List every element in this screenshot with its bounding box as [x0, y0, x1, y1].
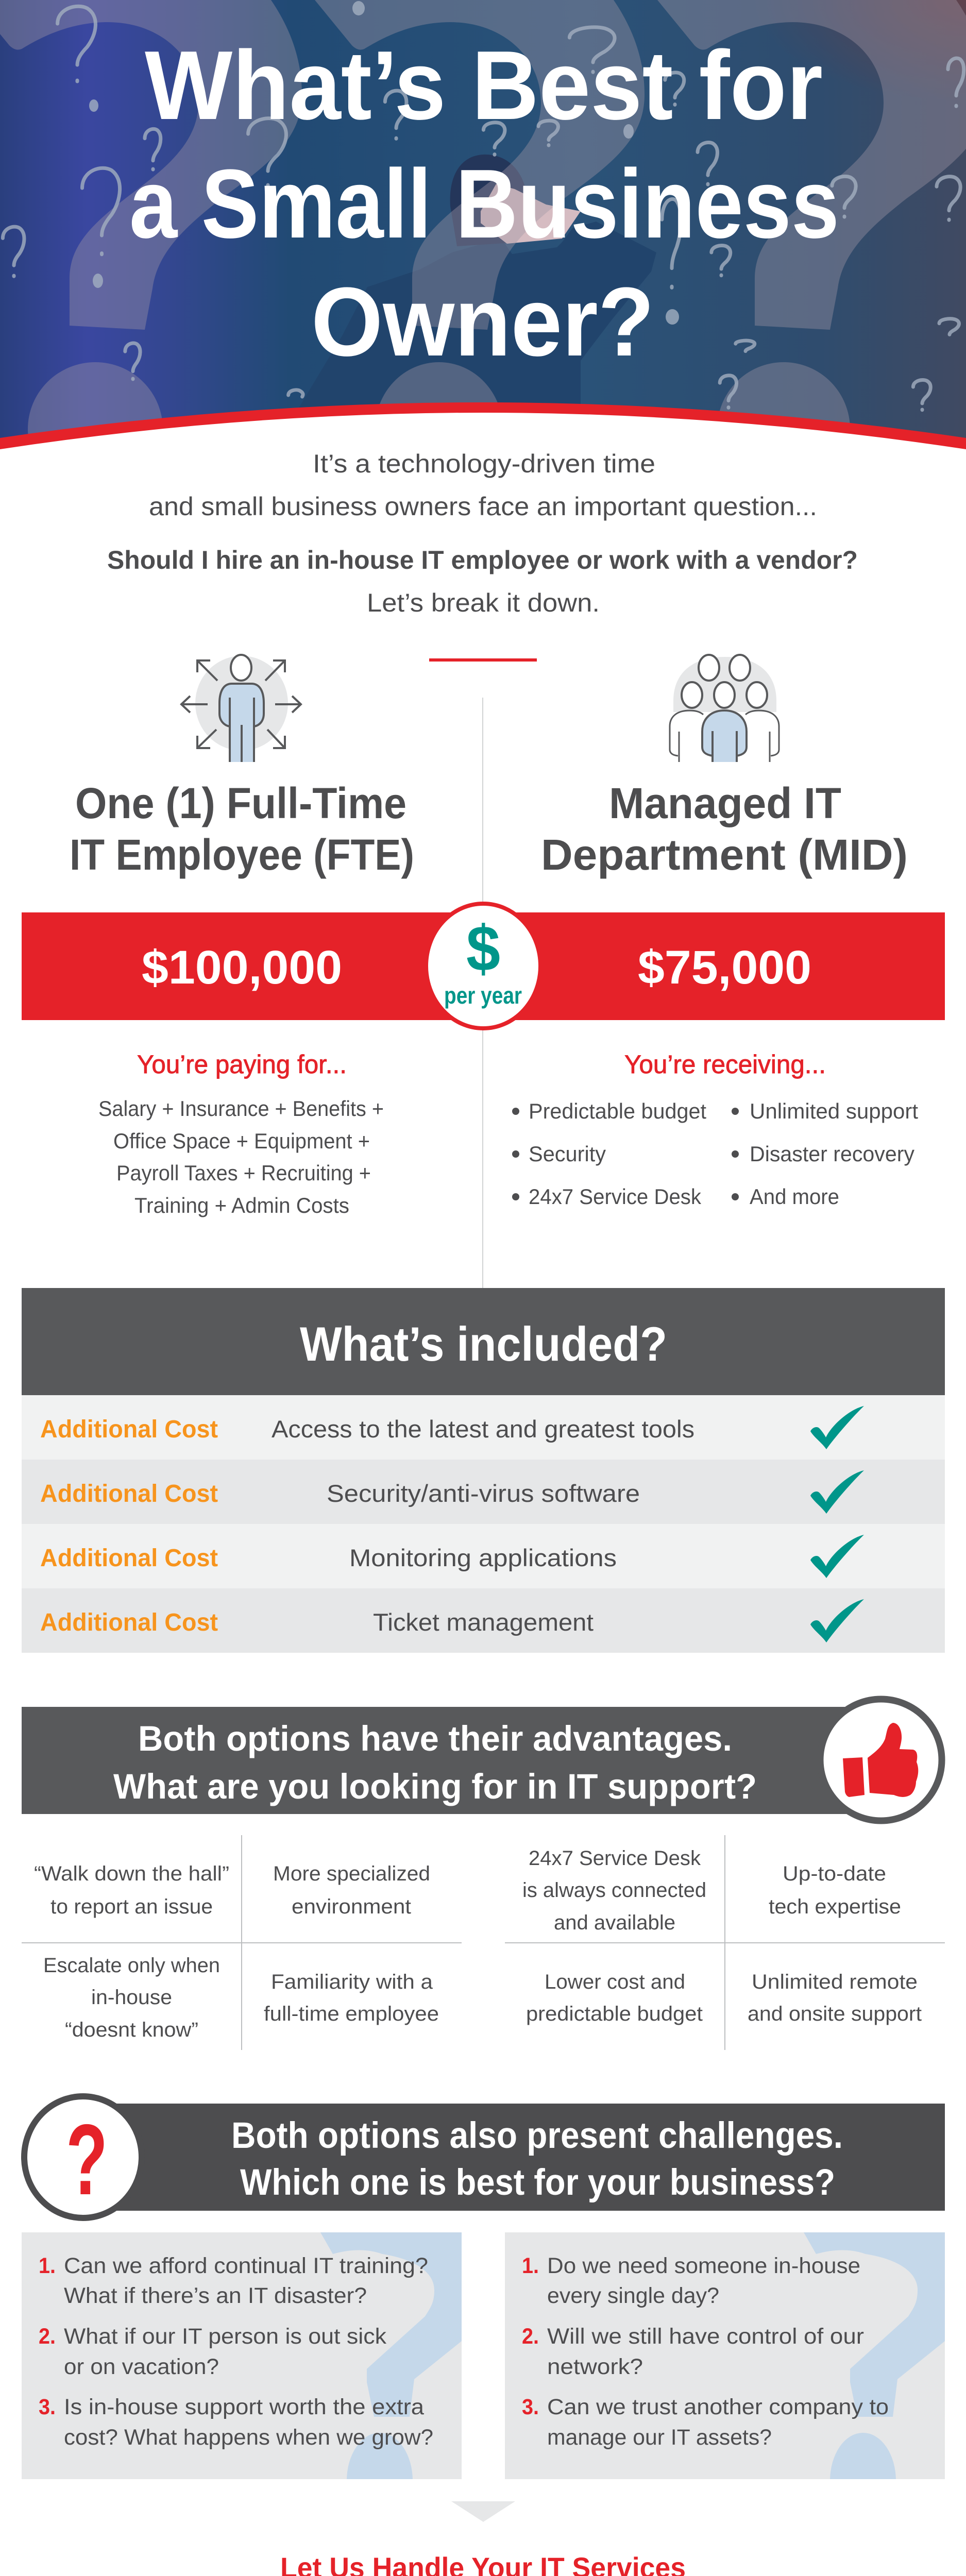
- advantages grid: [22, 1835, 945, 2050]
- panel: vendor challenges: 2.: [522, 2324, 539, 2349]
- banner: advantages: What are you looking for in IT support?: [113, 1767, 757, 1806]
- banner: advantages: [22, 1699, 942, 1821]
- receiving list: And more: [750, 1184, 839, 1209]
- row: tools: Access to the latest and greatest tools: [272, 1415, 694, 1443]
- panel: vendor challenges: 1.: [522, 2253, 539, 2278]
- cell: Unlimited remote: [752, 1971, 918, 1993]
- cell: full-time employee: [264, 2003, 439, 2025]
- icon: managed team: [670, 655, 779, 762]
- arrow: down: [451, 2501, 515, 2522]
- row: monitoring: [40, 1535, 864, 1578]
- panel: vendor challenges: [505, 2232, 945, 2479]
- cell: [273, 1862, 430, 1918]
- intro text: Let’s break it down.: [367, 588, 600, 617]
- price band: [22, 904, 945, 1028]
- heading: what's included: What’s included?: [300, 1317, 667, 1371]
- row: tickets: Additional Cost: [40, 1609, 218, 1636]
- cell: [748, 1971, 922, 2025]
- cell: predictable budget: [526, 2003, 703, 2025]
- cell: Up-to-date: [783, 1862, 886, 1885]
- price band: $75,000: [638, 941, 811, 994]
- cell: [43, 1954, 220, 2041]
- heading: FTE: [70, 779, 414, 879]
- receiving list: You’re receiving...: [624, 1050, 826, 1079]
- icon: thumbs up: [820, 1699, 942, 1821]
- icon: one employee with arrows: [181, 655, 301, 762]
- per year badge: [426, 904, 540, 1028]
- row: tools: [40, 1406, 864, 1449]
- paying for list: Training + Admin Costs: [134, 1193, 349, 1217]
- cell: to report an issue: [50, 1895, 213, 1918]
- panel: vendor challenges: Do we need someone in-house: [547, 2253, 860, 2278]
- cell: More specialized: [273, 1862, 430, 1885]
- intro text: and small business owners face an important question...: [149, 492, 817, 521]
- banner: challenges: Which one is best for your business?: [240, 2162, 835, 2203]
- banner: challenges: [24, 2096, 945, 2218]
- row: monitoring: Monitoring applications: [349, 1544, 617, 1571]
- hero banner: [0, 0, 966, 515]
- per year badge: per year: [444, 982, 522, 1009]
- row: security: Security/anti-virus software: [327, 1480, 640, 1507]
- panel: in-house challenges: What if our IT person is out sick: [64, 2324, 387, 2349]
- row: security: [40, 1470, 864, 1514]
- panel: vendor challenges: Will we still have control of our: [547, 2324, 864, 2349]
- cell: [34, 1862, 229, 1918]
- cell: and onsite support: [748, 2003, 922, 2025]
- heading: MID: Managed IT: [609, 779, 841, 827]
- receiving list: Predictable budget: [529, 1099, 706, 1123]
- panel: what's included: [22, 1288, 945, 1653]
- per year badge: $: [466, 913, 500, 985]
- cell: in-house: [91, 1986, 172, 2009]
- cell: environment: [292, 1895, 411, 1918]
- panel: in-house challenges: Can we afford continual IT training?: [64, 2253, 428, 2278]
- hero title: Owner?: [311, 267, 654, 377]
- cell: “doesnt know”: [65, 2019, 198, 2041]
- cell: 24x7 Service Desk: [529, 1847, 701, 1870]
- cell: Familiarity with a: [271, 1971, 433, 1993]
- hero title: What’s Best for: [145, 31, 823, 140]
- cell: Escalate only when: [43, 1954, 220, 1977]
- receiving list: 24x7 Service Desk: [529, 1184, 702, 1209]
- intro text: It’s a technology-driven time: [313, 449, 655, 478]
- panel: vendor challenges: Can we trust another company to: [547, 2395, 889, 2419]
- panel: in-house challenges: 1.: [39, 2253, 56, 2278]
- row: tools: Additional Cost: [40, 1416, 218, 1443]
- paying for list: [98, 1050, 384, 1217]
- panel: vendor challenges: network?: [547, 2354, 643, 2379]
- cell: [264, 1971, 439, 2025]
- row: tickets: Ticket management: [373, 1608, 594, 1636]
- banner: advantages: Both options have their advantages.: [138, 1719, 732, 1758]
- paying for list: Salary + Insurance + Benefits +: [98, 1096, 384, 1121]
- cell: [522, 1847, 706, 1934]
- icon: question mark: ?: [66, 2104, 108, 2216]
- banner: challenges: Both options also present challenges.: [231, 2115, 843, 2156]
- heading: MID: Department (MID): [541, 831, 908, 879]
- row: tickets: [40, 1599, 864, 1642]
- intro text: [107, 449, 858, 617]
- cell: tech expertise: [769, 1895, 901, 1918]
- panel: in-house challenges: What if there’s an IT disaster?: [64, 2283, 367, 2308]
- heading: MID: [541, 779, 908, 879]
- panel: vendor challenges: every single day?: [547, 2283, 719, 2308]
- receiving list: [512, 1050, 918, 1209]
- heading: FTE: IT Employee (FTE): [70, 831, 414, 879]
- cell: [526, 1971, 703, 2025]
- panel: in-house challenges: 2.: [39, 2324, 56, 2349]
- receiving list: Unlimited support: [750, 1099, 918, 1123]
- hero background: [0, 0, 966, 496]
- panel: in-house challenges: or on vacation?: [64, 2354, 219, 2379]
- row: security: Additional Cost: [40, 1480, 218, 1507]
- hero title: [129, 31, 839, 377]
- cell: is always connected: [522, 1879, 706, 1902]
- panel: vendor challenges: manage our IT assets?: [547, 2425, 772, 2450]
- cell: and available: [554, 1911, 675, 1934]
- hero title: a Small Business: [129, 149, 839, 259]
- paying for list: Office Space + Equipment +: [113, 1129, 370, 1153]
- heading: FTE: One (1) Full-Time: [75, 779, 406, 827]
- panel: vendor challenges: 3.: [522, 2395, 539, 2419]
- panel: in-house challenges: cost? What happens when we grow?: [64, 2425, 433, 2450]
- panel: in-house challenges: [22, 2232, 462, 2479]
- red arc: [0, 402, 966, 464]
- paying for list: Payroll Taxes + Recruiting +: [116, 1161, 371, 1185]
- paying for list: You’re paying for...: [137, 1050, 347, 1079]
- panel: in-house challenges: 3.: [39, 2395, 56, 2419]
- cell: “Walk down the hall”: [34, 1862, 229, 1885]
- price band: $100,000: [142, 941, 342, 994]
- intro text: Should I hire an in-house IT employee or work with a vendor?: [107, 546, 858, 574]
- receiving list: Security: [529, 1142, 606, 1166]
- cell: [769, 1862, 901, 1918]
- panel: in-house challenges: Is in-house support worth the extra: [64, 2395, 424, 2419]
- row: monitoring: Additional Cost: [40, 1545, 218, 1572]
- icon: question mark: [24, 2096, 142, 2218]
- cell: Lower cost and: [545, 1971, 685, 1993]
- receiving list: Disaster recovery: [750, 1142, 914, 1166]
